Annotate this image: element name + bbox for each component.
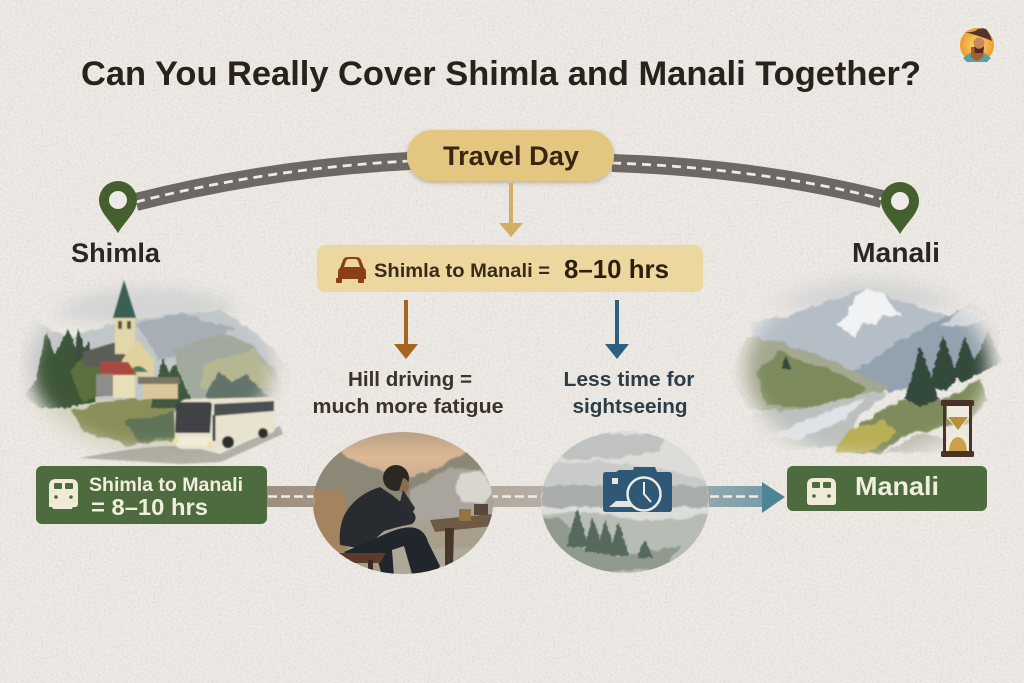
text: less sightseeing time: Less time for (564, 369, 695, 391)
text: less sightseeing time (564, 369, 695, 418)
icon: Shimla map pin (99, 181, 137, 233)
illustration: Manali mountains, river and pines (728, 272, 1003, 457)
icon: hourglass (941, 400, 974, 457)
icon: Manali map pin (881, 182, 919, 234)
heading: Manali: Manali (852, 237, 940, 268)
illustration: misty pine landscape (541, 431, 709, 573)
man (338, 465, 440, 576)
text: hill driving fatigue: Hill driving = (348, 369, 472, 391)
icon: bus front (49, 479, 78, 509)
trees left (24, 328, 195, 408)
text: hill driving fatigue: much more fatigue (312, 396, 504, 418)
arrow: to less time (605, 300, 629, 359)
road strip: from Shimla box to Manali arrow (267, 486, 762, 507)
arrow: Travel Day to duration (499, 183, 523, 237)
text: route and hours: Shimla to Manali (89, 474, 243, 496)
icon: bus front (807, 478, 836, 505)
panel: Shimla to Manali duration: = 8–10 hrs (91, 494, 208, 520)
title: Can You Really Cover Shimla and Manali Together? (81, 55, 921, 93)
hills and undergrowth wash (20, 285, 295, 460)
church (83, 280, 181, 399)
pines (781, 330, 1003, 407)
road: right arc (612, 163, 882, 199)
text: less sightseeing time: sightseeing (572, 396, 688, 418)
heading: Shimla: Shimla (71, 238, 161, 268)
logo: traveller avatar (960, 28, 994, 62)
arrow: to fatigue (394, 300, 418, 359)
illustration: tired traveller at roadside table (313, 432, 498, 578)
road under bus (80, 426, 283, 464)
table (430, 504, 493, 566)
text: hill driving fatigue (312, 369, 504, 418)
road: left arc (136, 161, 410, 202)
bus (173, 397, 275, 449)
text: hours: 8–10 hrs (564, 254, 669, 284)
text: Manali: Manali (855, 471, 939, 501)
pill: Travel Day: Travel Day (443, 141, 579, 171)
illustration: Shimla church, hills and bus (20, 280, 295, 464)
panel: drive duration (317, 245, 703, 292)
pill: Travel Day (407, 130, 614, 181)
panel: Manali destination (787, 466, 987, 511)
text: route: Shimla to Manali = (374, 260, 550, 282)
arrow head: to Manali (762, 482, 785, 513)
panel: Shimla to Manali duration (36, 466, 267, 524)
icon: camera with clock (603, 467, 672, 512)
icon: car (336, 257, 366, 283)
